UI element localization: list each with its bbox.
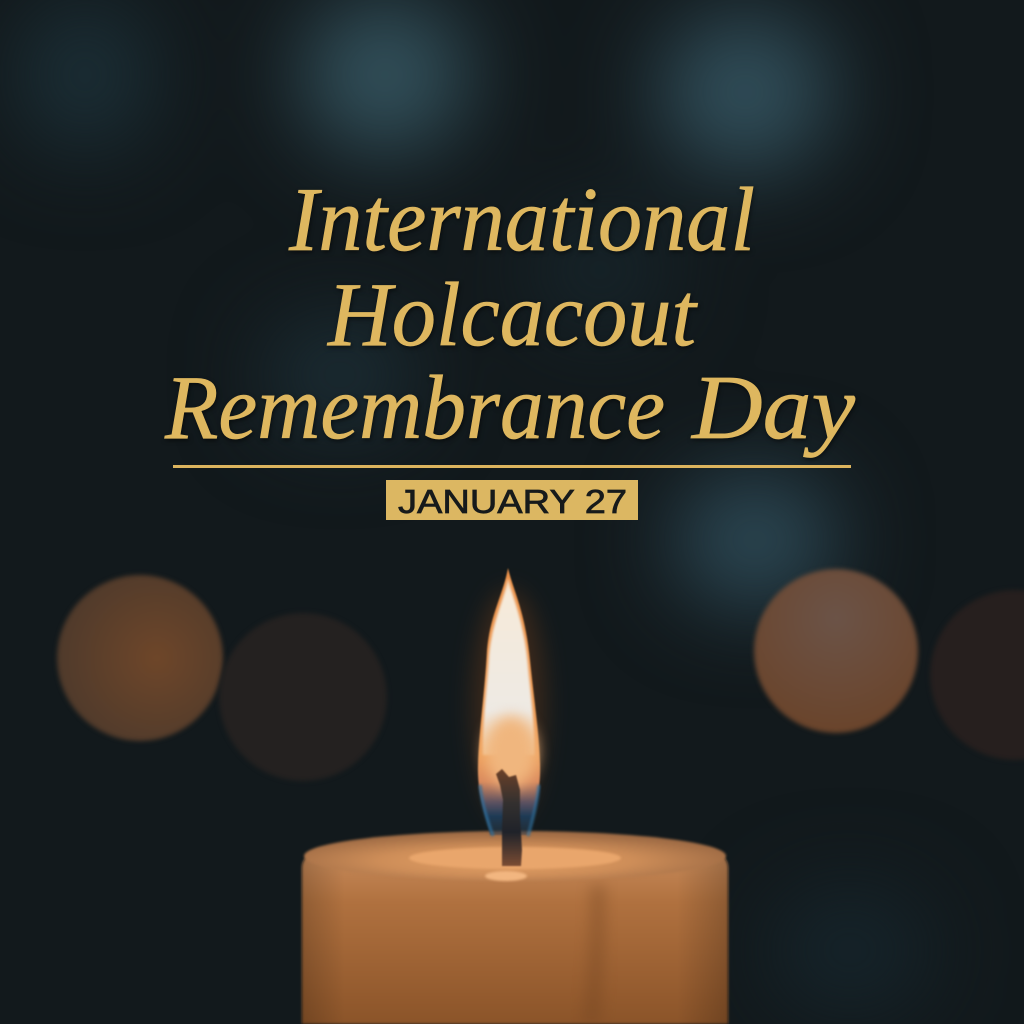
title [164,169,856,458]
flame blue edge right [528,785,539,836]
bokeh circle: right orange [754,569,918,733]
flame white core [483,578,534,755]
title line 3: Remembrance [164,357,665,458]
title line 3: Day [690,357,856,458]
bokeh circle: left dim [219,613,387,781]
title line 1: International [288,169,755,270]
gold rule [173,465,851,468]
candle drip [582,885,606,1024]
flame outer [478,568,540,835]
candle body [302,850,728,1024]
title line 2: Holcacout [327,264,699,365]
wax pool [409,847,621,869]
wick [496,769,522,866]
bokeh circle: left orange [57,575,223,741]
flame halo [473,590,545,820]
date badge: JANUARY 27 [398,483,627,520]
wax glow below wick [485,871,527,881]
candle top [304,831,726,881]
flame inner glow [485,716,537,788]
flame [478,568,540,836]
candle [302,831,728,1024]
candle edge shading [302,850,728,1024]
flame blue edge left [480,785,493,836]
bokeh circle: far right dim [930,590,1024,760]
